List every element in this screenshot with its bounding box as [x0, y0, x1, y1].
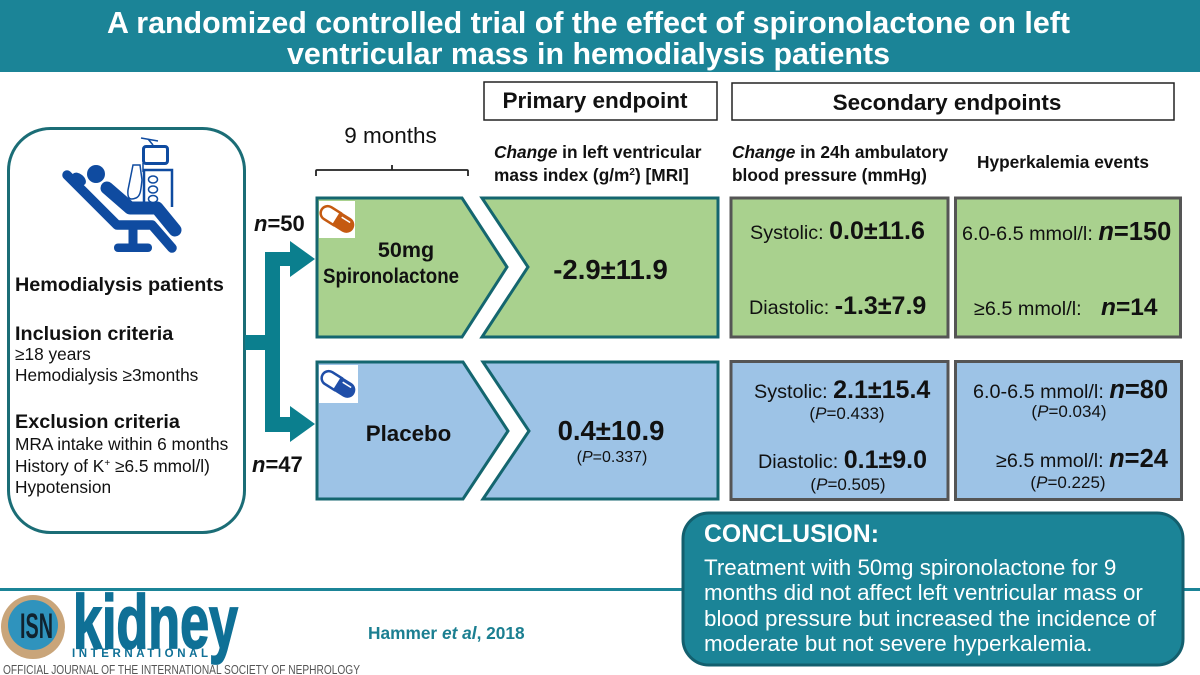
label: n=50: n=50	[254, 211, 305, 236]
column heading: LV mass: ) [MRI]	[635, 165, 689, 185]
column heading: hyperkalemia: Hyperkalemia events	[977, 152, 1149, 172]
logo: ISN seal: ISN	[20, 607, 53, 646]
arm: spironolactone: Spironolactone	[323, 264, 459, 288]
column heading: blood pressure	[732, 142, 948, 185]
panel: patient population	[8, 128, 244, 532]
citation: Hammer et al, 2018	[368, 623, 525, 643]
panel: hyperkalemia spironolactone: n=14	[1101, 294, 1158, 321]
logo: kidney international: INTERNATIONAL	[72, 648, 208, 660]
panel: blood pressure spironolactone	[731, 198, 948, 337]
panel: hyperkalemia spironolactone: 6.0-6.5 mmol/l: n=150	[962, 218, 1171, 246]
panel: hyperkalemia placebo: (P=0.225)	[1030, 473, 1106, 492]
box: secondary endpoints heading	[732, 83, 1174, 120]
panel: LV mass spironolactone: -2.9±11.9	[553, 254, 668, 285]
column heading: blood pressure: Change in 24h ambulatory	[732, 142, 948, 162]
logo: kidney international: kidney	[73, 580, 238, 665]
arm: spironolactone: 50mg	[378, 238, 434, 262]
panel: blood pressure spironolactone: Systolic: 0.0±11.6	[750, 217, 925, 245]
column heading: LV mass: mass index (g/m	[494, 165, 629, 185]
panel: LV mass placebo: (P=0.337)	[577, 449, 647, 466]
text: patient criteria: History of K	[15, 456, 104, 476]
logo: ISN seal	[1, 595, 65, 659]
title banner: ventricular mass in hemodialysis patients	[287, 37, 890, 71]
icon: patient in dialysis chair	[67, 138, 175, 252]
panel: blood pressure placebo: (P=0.505)	[810, 475, 886, 494]
logo: kidney international	[3, 580, 361, 675]
bracket: 9 months: 9 months	[344, 123, 437, 148]
panel: hyperkalemia spironolactone: ≥6.5 mmol/l:	[974, 298, 1082, 320]
panel: hyperkalemia spironolactone	[956, 198, 1180, 337]
text: patient criteria: ≥18 years	[15, 344, 91, 364]
arrow: randomization split	[245, 241, 315, 442]
panel: LV mass placebo	[483, 362, 718, 499]
callout: conclusion	[683, 513, 1183, 665]
panel: blood pressure placebo: (P=0.433)	[809, 404, 885, 423]
callout: conclusion: months did not affect left ventricular mass or	[704, 580, 1143, 605]
panel: hyperkalemia placebo	[956, 362, 1182, 500]
title banner	[0, 0, 1200, 72]
arm: placebo: Placebo	[366, 421, 451, 446]
text: patient criteria: Hemodialysis patients	[15, 274, 224, 296]
panel: blood pressure placebo	[731, 362, 948, 500]
panel: hyperkalemia placebo: 6.0-6.5 mmol/l: n=80	[973, 376, 1168, 404]
column heading: LV mass	[494, 142, 702, 185]
text: patient criteria: Exclusion criteria	[15, 411, 181, 433]
text: patient criteria: Inclusion criteria	[15, 323, 174, 345]
icon: blue capsule	[318, 368, 358, 401]
panel: hyperkalemia placebo: ≥6.5 mmol/l: n=24	[996, 445, 1169, 473]
label: n=47: n=47	[252, 452, 303, 477]
panel: blood pressure placebo: Systolic: 2.1±15.4	[754, 376, 930, 404]
panel: blood pressure spironolactone: Diastolic: -1.3±7.9	[749, 292, 926, 320]
box: primary endpoint heading: Primary endpoint	[502, 88, 688, 113]
text: patient criteria: Hemodialysis ≥3months	[15, 365, 199, 385]
panel: blood pressure placebo: Diastolic: 0.1±9.0	[758, 446, 927, 474]
callout: conclusion: blood pressure but increased the incidence of	[704, 606, 1157, 631]
column heading: LV mass: Change in left ventricular	[494, 142, 702, 162]
text: patient criteria: ≥6.5 mmol/l)	[110, 456, 210, 476]
column heading: LV mass: 2	[629, 167, 635, 178]
arm: placebo	[317, 362, 508, 499]
panel: hyperkalemia placebo: (P=0.034)	[1031, 402, 1107, 421]
panel: LV mass spironolactone	[482, 198, 718, 337]
callout: conclusion: CONCLUSION:	[704, 521, 879, 548]
text: patient criteria: MRA intake within 6 months	[15, 434, 229, 454]
footer rule	[0, 588, 1200, 591]
arm: spironolactone	[317, 198, 507, 337]
text: patient criteria: Hypotension	[15, 477, 111, 497]
title banner: A randomized controlled trial of the effect of spironolactone on left	[107, 6, 1070, 40]
callout: conclusion: moderate but not severe hyperkalemia.	[704, 631, 1092, 656]
box: secondary endpoints heading: Secondary endpoints	[833, 90, 1061, 115]
text: patient criteria	[15, 274, 229, 497]
text: patient criteria: +	[104, 458, 110, 469]
panel: LV mass placebo: 0.4±10.9	[558, 415, 664, 446]
bracket: 9 months	[316, 123, 468, 176]
icon: orange capsule	[317, 203, 357, 236]
box: primary endpoint heading	[484, 82, 717, 120]
callout: conclusion: Treatment with 50mg spironolactone for 9	[704, 555, 1116, 580]
column heading: blood pressure: blood pressure (mmHg)	[732, 165, 927, 185]
